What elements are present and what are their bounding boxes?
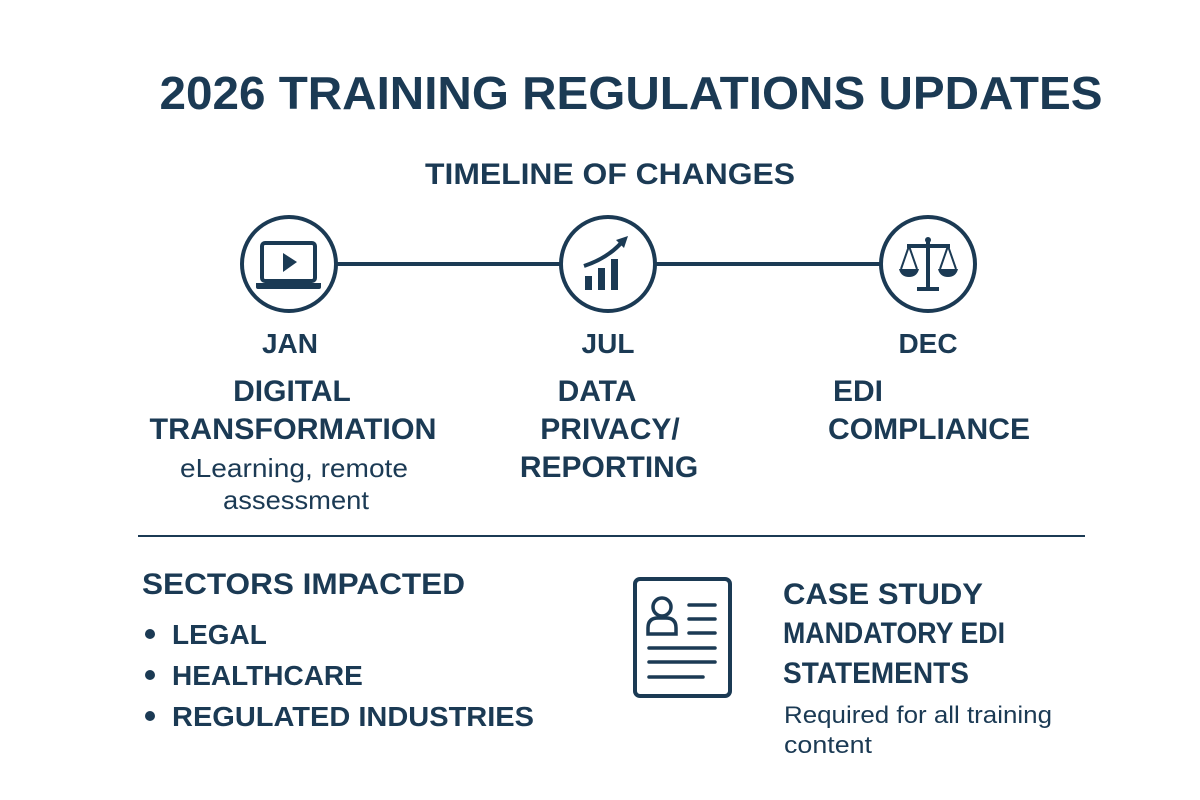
panel: sectors impacted bbox=[142, 568, 534, 732]
icon: laptop with play bbox=[242, 217, 336, 311]
panel: case study: MANDATORY EDI bbox=[783, 617, 1005, 650]
panel: case study bbox=[783, 578, 1052, 759]
icon: growth chart bbox=[561, 217, 655, 311]
icon: scales of justice bbox=[881, 217, 975, 311]
milestone: JAN: assessment bbox=[223, 485, 370, 515]
title: 2026 TRAINING REGULATIONS UPDATES bbox=[160, 67, 1102, 119]
panel: case study: STATEMENTS bbox=[783, 657, 969, 690]
panel: case study: CASE STUDY bbox=[783, 578, 983, 611]
milestone: DEC: COMPLIANCE bbox=[828, 413, 1030, 446]
panel: sectors impacted: HEALTHCARE bbox=[172, 660, 363, 691]
milestone: JAN: DIGITAL bbox=[233, 375, 351, 408]
milestone: JUL: JUL bbox=[582, 328, 634, 359]
milestone: JUL: PRIVACY/ bbox=[540, 413, 680, 446]
milestone: JUL: REPORTING bbox=[520, 451, 698, 484]
milestone: DEC bbox=[828, 328, 1030, 446]
subtitle: timeline of changes: TIMELINE OF CHANGES bbox=[425, 158, 795, 191]
timeline bbox=[242, 217, 975, 311]
panel: sectors impacted: SECTORS IMPACTED bbox=[142, 568, 465, 601]
milestone: DEC: EDI bbox=[833, 375, 883, 408]
milestone: JUL: DATA bbox=[558, 375, 636, 408]
milestone: JUL bbox=[520, 328, 698, 484]
milestone: JAN: JAN bbox=[262, 328, 318, 359]
panel: sectors impacted: LEGAL bbox=[172, 619, 267, 650]
milestone: JAN: TRANSFORMATION bbox=[150, 413, 436, 446]
panel: sectors impacted: REGULATED INDUSTRIES bbox=[172, 701, 534, 732]
icon: document profile bbox=[635, 579, 730, 696]
milestone: JAN: eLearning, remote bbox=[180, 453, 408, 483]
panel: case study: Required for all training bbox=[784, 702, 1052, 729]
milestone: JAN bbox=[150, 328, 436, 515]
milestone: DEC: DEC bbox=[898, 328, 958, 359]
panel: case study: content bbox=[784, 732, 872, 759]
